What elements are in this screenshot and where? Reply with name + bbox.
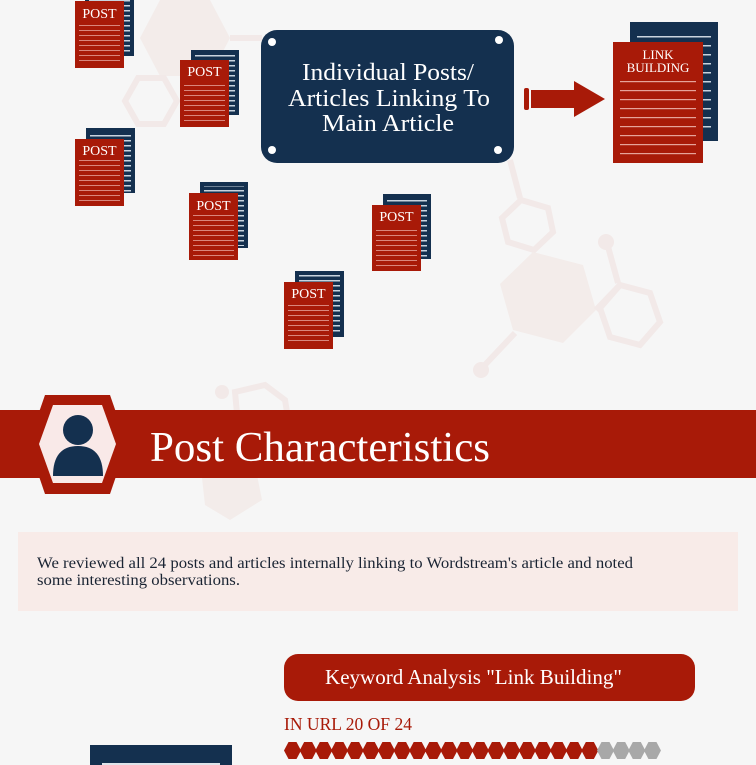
post doc 5 (372, 194, 431, 271)
icon: person hexagon (28, 395, 127, 494)
link building doc (613, 22, 718, 163)
post doc 4 (189, 182, 248, 260)
post doc 1 (75, 0, 134, 68)
post doc 2 (180, 50, 239, 127)
intro text box: We reviewed all 24 posts and articles internally linking to Wordstream's article and noted (37, 555, 633, 572)
post doc 3: POST (82, 144, 117, 159)
post doc 1: POST (82, 7, 117, 22)
post doc 6 (284, 271, 344, 349)
dark box bottom left (90, 745, 232, 765)
post doc 2: POST (187, 65, 222, 80)
post doc 5: POST (379, 210, 414, 225)
intro text box: some interesting observations. (37, 572, 240, 589)
hexagon bar 20 of 24 (284, 742, 661, 759)
arrow (524, 81, 605, 117)
main box: individual posts linking: Articles Linking To (288, 86, 490, 112)
section banner: post characteristics (0, 395, 756, 494)
post doc 4: POST (196, 199, 231, 214)
link building doc: LINK (642, 47, 674, 62)
keyword analysis pill (284, 654, 695, 701)
main box: individual posts linking: Main Article (322, 111, 454, 137)
intro text box (18, 532, 738, 611)
main box: individual posts linking: Individual Posts/ (302, 60, 474, 86)
background decoration: hexagons (125, 0, 660, 520)
post doc 6: POST (291, 287, 326, 302)
keyword analysis pill: Keyword Analysis "Link Building" (325, 665, 622, 689)
link building doc: BUILDING (627, 60, 689, 75)
post doc 3 (75, 128, 135, 206)
main box: individual posts linking (261, 30, 514, 163)
section banner: post characteristics: Post Characteristics (150, 425, 490, 471)
label: in url: IN URL 20 OF 24 (284, 714, 412, 734)
